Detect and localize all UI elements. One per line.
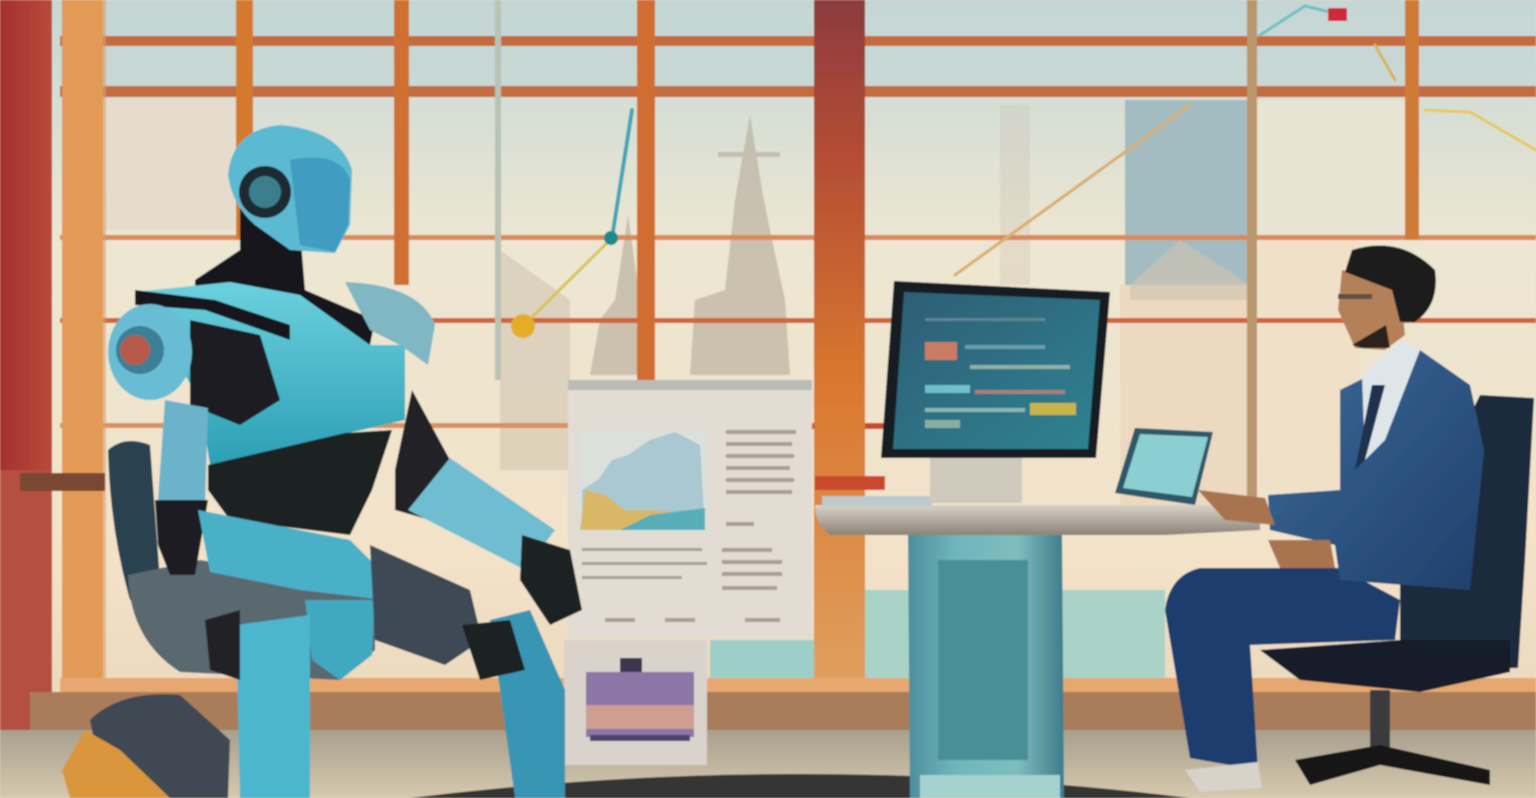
window sill — [30, 678, 1536, 730]
floor — [0, 730, 1536, 798]
left lower pillar — [0, 470, 52, 740]
robot chair — [108, 441, 375, 680]
man trousers — [1165, 568, 1400, 770]
bar chart — [578, 430, 708, 532]
robot lower leg — [236, 615, 310, 798]
floor shadow — [410, 774, 1190, 798]
robot right knee and shin — [490, 610, 565, 798]
robot chest mechanics — [190, 320, 280, 425]
man shirt — [1362, 340, 1420, 460]
centre pillar — [814, 0, 865, 692]
city skyline tower — [500, 105, 1250, 470]
robot shoulder — [108, 304, 192, 400]
left red pillar — [0, 0, 52, 470]
left orange pillar — [62, 0, 103, 690]
man head — [1338, 246, 1436, 350]
robot head — [228, 125, 352, 253]
robot abdomen — [208, 430, 392, 535]
growth line chart on window — [511, 6, 1536, 338]
board text lines — [582, 430, 796, 622]
computer monitor — [881, 281, 1110, 503]
robot — [62, 125, 582, 798]
small ledge — [20, 473, 105, 491]
robot foot — [90, 694, 230, 798]
man jacket — [1268, 350, 1484, 590]
presentation board — [568, 380, 812, 638]
man tie — [1355, 385, 1385, 470]
man hands — [1198, 490, 1275, 525]
robot forearm right — [395, 390, 582, 625]
robot upper arm — [158, 400, 208, 505]
robot pelvis and thigh — [198, 510, 385, 600]
desk pedestal — [908, 535, 1064, 798]
robot torso armour — [135, 282, 405, 465]
small poster — [564, 640, 707, 765]
desk top — [815, 476, 1260, 535]
man shoes — [1185, 762, 1262, 792]
robot hand left — [155, 500, 208, 575]
tablet — [1115, 428, 1213, 505]
robot neck and shoulder mechanics — [195, 200, 375, 345]
businessman — [1165, 246, 1484, 792]
office chair — [1260, 395, 1534, 785]
